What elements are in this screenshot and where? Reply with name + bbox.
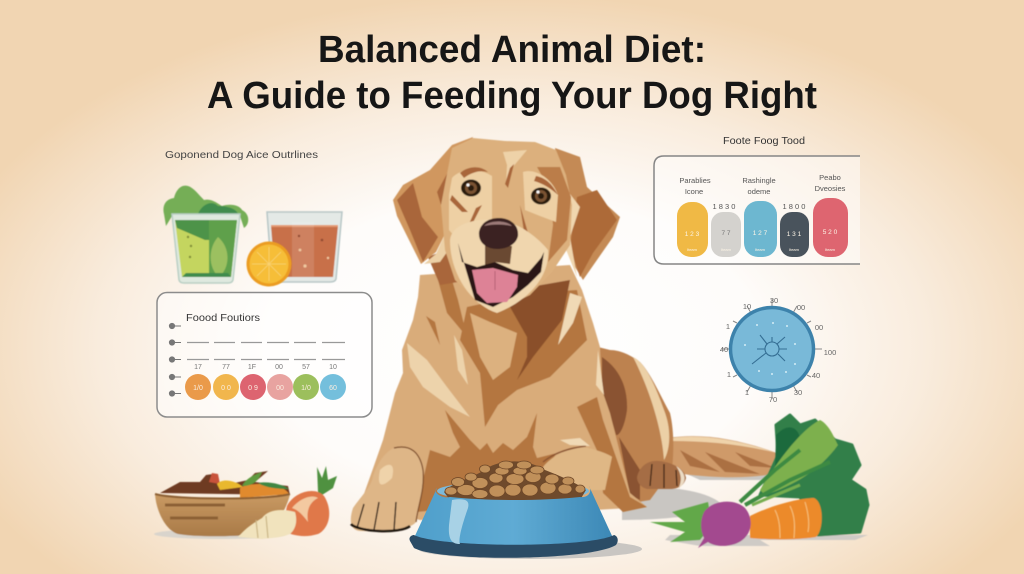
chest cream streaks [558,293,582,345]
title [207,29,817,117]
rule lines [187,342,345,360]
coloured nutrient circles: 1/0 [193,385,203,392]
column values: 00 [275,364,283,371]
icon: orange juice glass [267,212,342,282]
neck and chest dark fur [460,290,587,427]
dog nose [479,218,518,249]
dial labels: 1 [727,370,731,379]
dial labels: 00 [815,323,823,332]
bowl highlight [449,499,468,544]
bar labels [679,173,846,211]
coloured nutrient circles [185,374,346,400]
vegetable: radish and garlic [238,466,337,539]
bar labels: Dveosies [815,184,846,193]
bar values: 5 2 0 [823,229,838,236]
dog tongue [472,268,518,303]
timeline markers [169,323,181,396]
foreleg dark fur [577,397,647,512]
veg shadow [665,535,868,546]
panel: food fountains [157,292,372,417]
bar labels: Rashingle [742,176,776,185]
column values [194,364,337,371]
dial labels: 00 [797,303,805,312]
beet tops [650,502,712,542]
bar labels: Peabo [819,173,841,182]
dog left ear [393,137,473,264]
dial labels: 10 [743,302,751,311]
heading: food guide: Foote Foog Tood [723,135,805,147]
food bowl with kibble [409,461,642,559]
kibble [444,461,586,500]
dog left eye [461,180,481,196]
carrot [750,498,822,539]
column values: 10 [329,364,337,371]
dog right paw [637,461,686,489]
foreleg cream highlight [543,447,612,490]
chart: circular dial [720,296,836,404]
dog muzzle [450,220,548,313]
bar values: 1 3 1 [787,231,802,238]
bar values: 1 2 7 [753,230,768,237]
column values: 77 [222,364,230,371]
dial dots [744,322,796,375]
dog right eye [531,188,551,204]
bar labels: 1 8 3 0 [713,202,735,211]
bar labels: 1 8 0 0 [783,202,805,211]
icon: orange slice [246,242,292,286]
dial labels: 70 [769,395,777,404]
column values: 57 [302,364,310,371]
panel heading: Foood Foutiors [186,312,260,324]
dog mouth [458,243,544,307]
bar labels: Icone [685,187,703,196]
heading: outlines: Goponend Dog Aice Outrlines [165,149,318,161]
bowl back rim [437,481,589,501]
dial labels: 1 [726,322,730,331]
bars [677,202,708,257]
beet [698,502,751,548]
dial labels: 30 [770,296,778,305]
dog neck shadow [428,250,470,285]
bar values: Iteam [687,247,698,252]
bar labels: Parablies [679,176,711,185]
dog head [441,138,572,312]
right eye patch [523,171,558,222]
bar labels: odeme [748,187,770,196]
dial hub [752,335,787,364]
dial labels: 40 [720,345,728,354]
shadows under dog [622,474,775,520]
dial labels: 40 [812,371,820,380]
bowl shadow [418,539,642,559]
dial labels [720,296,836,404]
dog haunch [590,347,673,505]
dial labels: 30 [794,388,802,397]
coloured nutrient circles: 00 [276,385,284,392]
coloured nutrient circles: 60 [329,385,337,392]
dog right ear [555,148,620,280]
bowl rim [409,535,618,558]
vegetables: greens, carrot, beet [650,415,868,548]
bar values: Iteam [721,247,732,252]
left eye patch [449,170,492,245]
right head shading [537,167,571,262]
coloured nutrient circles: 1/0 [301,385,311,392]
icon: green drink glass [163,186,248,283]
coloured nutrient circles: 0 0 [221,385,231,392]
dog illustration [351,137,778,531]
bar values: Iteam [789,247,800,252]
wooden food bowl [154,471,290,539]
bowl body [414,486,613,546]
bar values: Iteam [755,247,766,252]
title: A Guide to Feeding Your Dog Right [207,75,817,117]
column values: 1F [248,364,256,371]
dial labels: 1 [745,388,749,397]
dial labels: 100 [824,348,836,357]
coloured nutrient circles: 0 9 [248,385,258,392]
bar values: Iteam [825,247,836,252]
title: Balanced Animal Diet: [318,29,706,71]
bar values [685,229,838,252]
dog torso [360,265,647,520]
lower chest dark fur [417,410,557,512]
dog left foreleg and paw [351,447,423,531]
dark leaves [760,415,868,535]
light leaf [760,420,838,495]
dog tail [668,436,778,477]
column values: 17 [194,364,202,371]
panel: food portions [654,156,860,264]
bar values: 7 7 [721,230,731,237]
bar values: 1 2 3 [685,231,700,238]
